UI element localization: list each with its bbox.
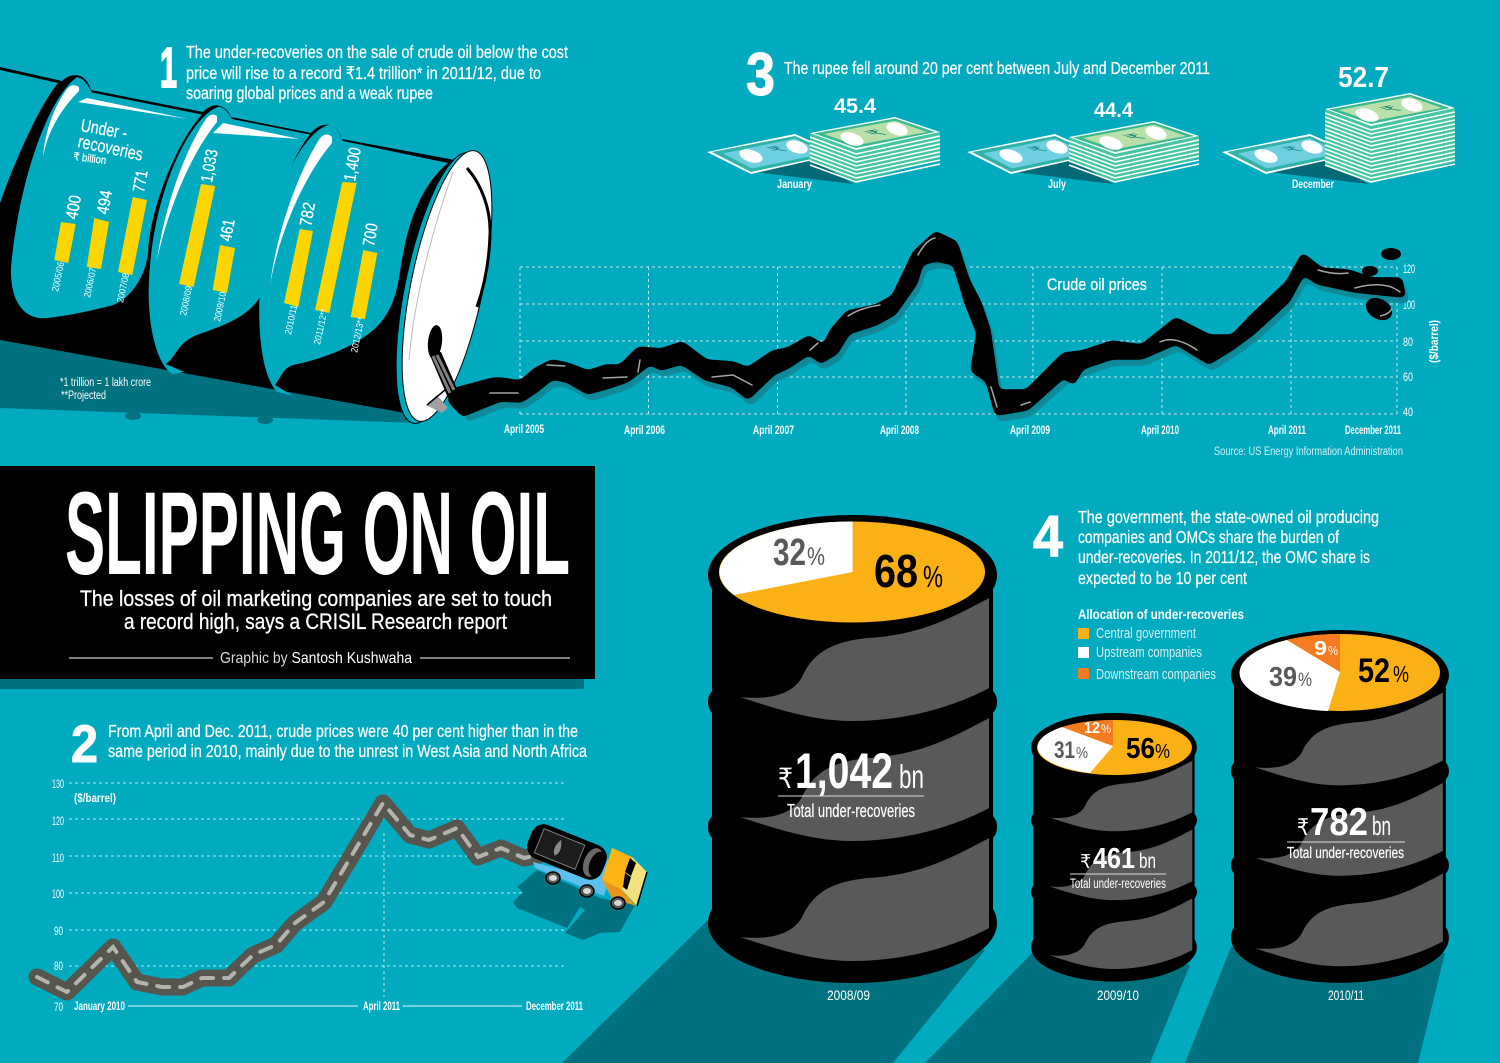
pie 2010/11 — [1240, 634, 1440, 711]
crude oil price chart — [426, 234, 1441, 458]
x axis dates: December 2011 — [1345, 423, 1401, 437]
byline: Graphic by Santosh Kushwaha — [220, 650, 412, 667]
total 2010/11: 782 — [1310, 801, 1368, 844]
title: SLIPPING ON OIL — [65, 468, 570, 600]
legend title: Allocation of under-recoveries — [1078, 606, 1244, 622]
pie 2009/10: 12 — [1084, 720, 1100, 737]
money stack: January: ₹ — [763, 144, 793, 154]
bar values: 1,400 — [340, 146, 365, 183]
text block 1 — [186, 42, 568, 103]
x axis dates: April 2008 — [880, 423, 919, 437]
pie 2009/10: 56 — [1126, 733, 1155, 765]
oil highlights — [490, 238, 1400, 407]
bar year labels — [50, 261, 367, 354]
legend items — [1078, 626, 1216, 683]
bar year labels: 2007/08 — [115, 272, 132, 304]
barrel 2009/10 — [1031, 713, 1197, 1003]
barrel 2010/11 — [1231, 630, 1449, 1003]
y axis: 40 — [1403, 405, 1413, 419]
y axis labels: 70 — [54, 1000, 63, 1014]
y axis: ($/barrel) — [1427, 320, 1441, 363]
bar heading — [73, 115, 145, 167]
rupee text: The rupee fell around 20 per cent between July and December 2011 — [784, 58, 1210, 78]
text block 2 — [108, 721, 587, 761]
x axis dates: April 2010 — [1141, 423, 1179, 437]
text block 4 — [1078, 507, 1379, 588]
pie 2009/10: % — [1076, 745, 1088, 762]
text block 4: expected to be 10 per cent — [1078, 568, 1247, 588]
oil ribbon shadow — [468, 240, 1406, 419]
icon: tanker truck — [513, 820, 647, 940]
bar year labels: 2009/10 — [212, 291, 229, 323]
x axis dates — [504, 422, 1401, 437]
total 2009/10: bn — [1139, 850, 1156, 873]
total 2010/11: bn — [1372, 811, 1391, 841]
footnotes: *1 trillion = 1 lakh crore — [60, 377, 151, 389]
bar heading: Under - — [79, 115, 129, 143]
oil ribbon — [450, 234, 1403, 414]
road line chart — [37, 777, 583, 1014]
total 2010/11: Total under-recoveries — [1287, 845, 1404, 862]
legend items: Downstream companies — [1096, 667, 1216, 683]
number 3: 3 — [746, 41, 775, 108]
x axis labels: January 2010 — [74, 999, 125, 1013]
section 3: rupee heading — [746, 41, 1210, 108]
number 2: 2 — [71, 715, 98, 774]
subtitle: The losses of oil marketing companies are set to touch — [80, 586, 552, 611]
text block 4: The government, the state-owned oil producing — [1078, 507, 1379, 527]
total 2009/10: ₹ — [1080, 852, 1091, 873]
money stack: January: ₹ — [860, 128, 894, 138]
text block 1: soaring global prices and a weak rupee — [186, 83, 433, 103]
barrel 2008/09 — [708, 515, 997, 1003]
total 2009/10 — [1070, 843, 1166, 891]
chart title: Crude oil prices — [1047, 275, 1147, 294]
total 2008/09: 1,042 — [795, 743, 893, 799]
bar values: 461 — [216, 218, 239, 243]
bar values: 782 — [296, 201, 319, 228]
money stack: December: December — [1292, 177, 1334, 191]
text block 4: companies and OMCs share the burden of — [1078, 527, 1339, 547]
subtitle — [80, 586, 552, 634]
text block 2: same period in 2010, mainly due to the unrest in West Asia and North Africa — [108, 741, 587, 761]
text block 1: The under-recoveries on the sale of crude oil below the cost — [186, 42, 568, 62]
oil drops — [1362, 248, 1401, 325]
x axis dates: April 2007 — [753, 423, 794, 437]
money stack: December: ₹ — [1375, 104, 1409, 114]
y axis: 60 — [1403, 370, 1413, 384]
bar heading: ₹ billion — [73, 151, 107, 167]
money stack: July: 44.4 — [1094, 99, 1133, 122]
total 2010/11 — [1287, 801, 1405, 862]
bar values — [62, 146, 382, 248]
y axis labels: 80 — [54, 959, 63, 973]
money stack: December — [1222, 62, 1455, 191]
y axis labels: ($/barrel) — [74, 791, 116, 805]
bar values: 400 — [62, 194, 85, 221]
pie 2010/11: % — [1328, 643, 1338, 658]
subtitle: a record high, says a CRISIL Research report — [124, 609, 507, 634]
pie 2010/11: 52 — [1358, 652, 1390, 690]
bar year labels: 2012/13** — [349, 316, 367, 354]
bar year labels: 2011/12** — [312, 308, 330, 346]
bar year labels: 2008/09 — [178, 285, 195, 317]
y axis: 100 — [1403, 298, 1415, 312]
bar year labels: 2010/11 — [283, 304, 300, 336]
section 4 heading — [1033, 504, 1379, 588]
pie 2010/11: % — [1393, 661, 1409, 687]
number 1: 1 — [160, 36, 177, 100]
y axis labels: 120 — [52, 814, 64, 828]
year label: 2008/09 — [827, 987, 870, 1003]
pie 2009/10: % — [1101, 722, 1111, 736]
section 1: tipped oil barrel with under-recoveries bars — [0, 67, 510, 430]
bar year labels: 2005/06 — [50, 261, 67, 293]
bar values: 700 — [359, 222, 382, 248]
x axis labels: December 2011 — [526, 999, 583, 1013]
bars — [54, 182, 377, 319]
total 2008/09: ₹ — [778, 763, 793, 794]
pie 2008/09 — [719, 521, 985, 622]
x axis dates: April 2009 — [1010, 423, 1050, 437]
bar year labels: 2006/07 — [82, 267, 99, 299]
money stack: July: ₹ — [1023, 144, 1053, 154]
money stack: July — [967, 99, 1199, 191]
source: Source: US Energy Information Administration — [1214, 446, 1403, 458]
legend — [1078, 606, 1244, 683]
section 1 heading — [160, 36, 568, 103]
road — [37, 803, 539, 992]
pie 2010/11: % — [1298, 670, 1312, 691]
black panel — [0, 466, 595, 679]
barrel body — [0, 67, 460, 413]
bar values: 771 — [129, 169, 152, 194]
pie 2010/11: 9 — [1314, 638, 1327, 660]
money stack: July: July — [1048, 177, 1066, 191]
barrel ground shadow — [0, 340, 417, 424]
legend items: Upstream companies — [1096, 645, 1202, 661]
text block 1: price will rise to a record ₹1.4 trillion* in 2011/12, due to — [186, 63, 541, 83]
year label: 2010/11 — [1328, 987, 1364, 1003]
y axis labels: 90 — [54, 924, 63, 938]
money stack: January: January — [777, 177, 812, 191]
panel shadow — [0, 679, 584, 689]
text block 4: under-recoveries. In 2011/12, the OMC share is — [1078, 547, 1370, 567]
y axis — [1403, 262, 1441, 419]
pie 2008/09: 32 — [773, 532, 806, 574]
oil pouring from the barrel — [426, 352, 459, 413]
bar values: 1,033 — [197, 148, 222, 184]
total 2008/09: bn — [899, 758, 924, 795]
footnotes: **Projected — [61, 390, 106, 402]
footnotes — [60, 377, 151, 402]
legend items: Central government — [1096, 626, 1196, 642]
money stack: January: 45.4 — [834, 95, 876, 118]
year label: 2009/10 — [1097, 987, 1139, 1003]
total 2008/09: Total under-recoveries — [787, 801, 915, 821]
barrel shadows on the floor — [562, 920, 1445, 1063]
barrel lid — [378, 144, 510, 430]
money stack: July: ₹ — [1119, 132, 1153, 142]
money stack: December: 52.7 — [1338, 62, 1389, 94]
total 2008/09 — [778, 743, 924, 821]
text block 2: From April and Dec. 2011, crude prices were 40 per cent higher than in the — [108, 721, 578, 741]
bar values: 494 — [93, 189, 116, 216]
pie 2009/10 — [1037, 720, 1192, 775]
money stack: December: ₹ — [1278, 144, 1308, 154]
x axis dates: April 2005 — [504, 422, 544, 436]
x axis labels: April 2011 — [363, 999, 400, 1013]
total 2010/11: ₹ — [1297, 814, 1309, 840]
y axis labels: 110 — [52, 851, 64, 865]
pie 2009/10: 31 — [1054, 737, 1075, 764]
section 2 heading — [71, 715, 587, 774]
y axis labels: 100 — [52, 887, 64, 901]
title panel — [0, 466, 595, 689]
y axis labels — [52, 777, 116, 1014]
pie 2008/09: % — [923, 559, 943, 594]
y axis: 120 — [1403, 262, 1415, 276]
x axis dates: April 2011 — [1268, 423, 1306, 437]
number 4: 4 — [1033, 504, 1063, 569]
x axis labels — [74, 999, 583, 1013]
total 2009/10: Total under-recoveries — [1070, 876, 1166, 891]
pie 2010/11: 39 — [1269, 661, 1297, 692]
bar heading: recoveries — [76, 131, 145, 165]
total 2009/10: 461 — [1093, 843, 1135, 875]
pie 2008/09: 68 — [874, 545, 918, 597]
pie 2008/09: % — [807, 543, 825, 571]
money stack: January — [707, 95, 940, 191]
x axis dates: April 2006 — [624, 423, 665, 437]
y axis: 80 — [1403, 335, 1413, 349]
pie 2009/10: % — [1155, 741, 1170, 763]
y axis labels: 130 — [52, 777, 64, 791]
road markings — [37, 803, 539, 992]
